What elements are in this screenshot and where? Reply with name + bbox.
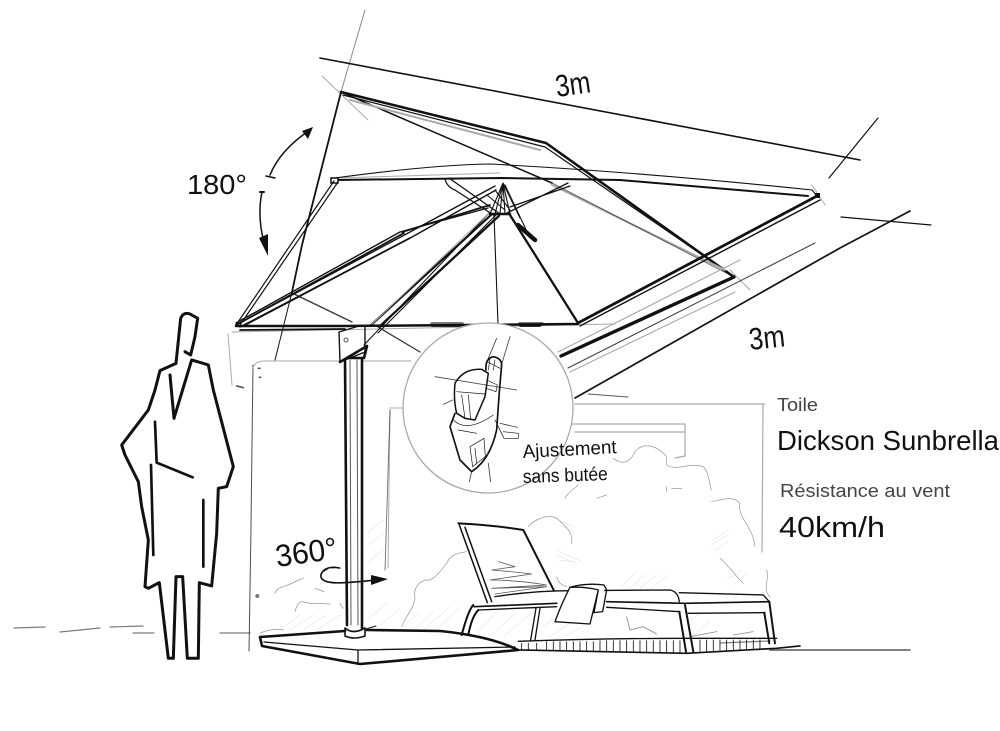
label: adjustment note: sans butée [522, 464, 608, 488]
label: 3m depth: 3m [747, 318, 787, 357]
dimension line: canopy width 3m [320, 58, 878, 178]
wind resistance specification: 40km/h [779, 512, 885, 544]
ground lines [14, 626, 910, 650]
wind resistance specification [779, 481, 950, 544]
fabric specification: Toile [777, 395, 818, 415]
tilt arrows 180 degrees [259, 127, 313, 256]
label: adjustment note: Ajustement [522, 437, 618, 463]
detail magnifier circle [403, 323, 573, 493]
wind resistance specification: Résistance au vent [780, 481, 950, 501]
background wall and hedge [228, 334, 770, 651]
fabric specification: Dickson Sunbrella [777, 425, 999, 456]
dimension line: canopy depth 3m [558, 211, 931, 398]
label: 360 degrees: 360° [273, 531, 339, 574]
silhouette figure for scale [122, 313, 233, 658]
parasol canopy [232, 10, 825, 360]
square ground base [260, 626, 518, 664]
rotation arrow around pole [321, 567, 388, 585]
label: adjustment note [522, 437, 618, 488]
label: 180 degrees: 180° [187, 169, 247, 200]
fabric specification [777, 395, 999, 456]
pole, bracket and mast [339, 326, 367, 638]
lounge chair with towel [458, 523, 800, 653]
label: 3m width: 3m [553, 64, 593, 104]
